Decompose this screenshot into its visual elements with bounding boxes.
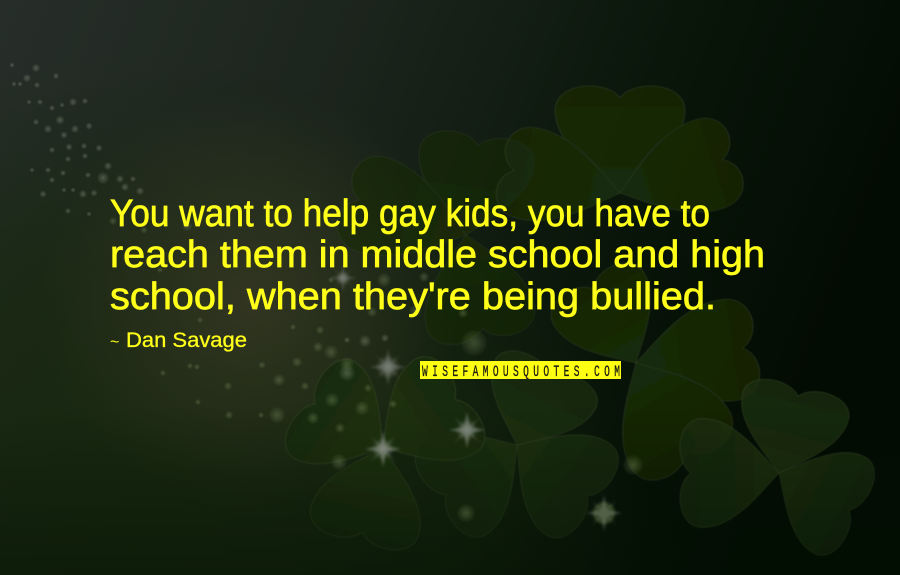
shamrock: bottom center bbox=[406, 343, 628, 547]
star 2 bbox=[449, 412, 485, 448]
sparkle dots bbox=[10, 62, 643, 522]
star 4 bbox=[370, 349, 406, 385]
shamrock: back left bbox=[331, 127, 539, 349]
star 5 bbox=[330, 264, 356, 292]
shamrock: middle right bbox=[543, 254, 763, 490]
quote text bbox=[110, 193, 765, 318]
quote line 3: school, when they're being bullied. bbox=[110, 276, 716, 318]
author: Dan Savage bbox=[126, 329, 247, 352]
author: ~ bbox=[110, 334, 119, 351]
shamrock: top bbox=[492, 86, 750, 238]
quote line 2: reach them in middle school and high bbox=[110, 234, 765, 276]
shamrock: bottom left bbox=[276, 348, 495, 556]
sparkle stars bbox=[330, 264, 622, 531]
badge: wisefamousquotes: WISEFAMOUSQUOTES.COM bbox=[422, 363, 620, 381]
quote line 1: You want to help gay kids, you have to bbox=[110, 193, 710, 235]
shamrock group bbox=[276, 86, 883, 563]
star 1 bbox=[365, 431, 401, 467]
shamrock: bottom right bbox=[680, 374, 883, 563]
star 3 bbox=[586, 495, 622, 531]
